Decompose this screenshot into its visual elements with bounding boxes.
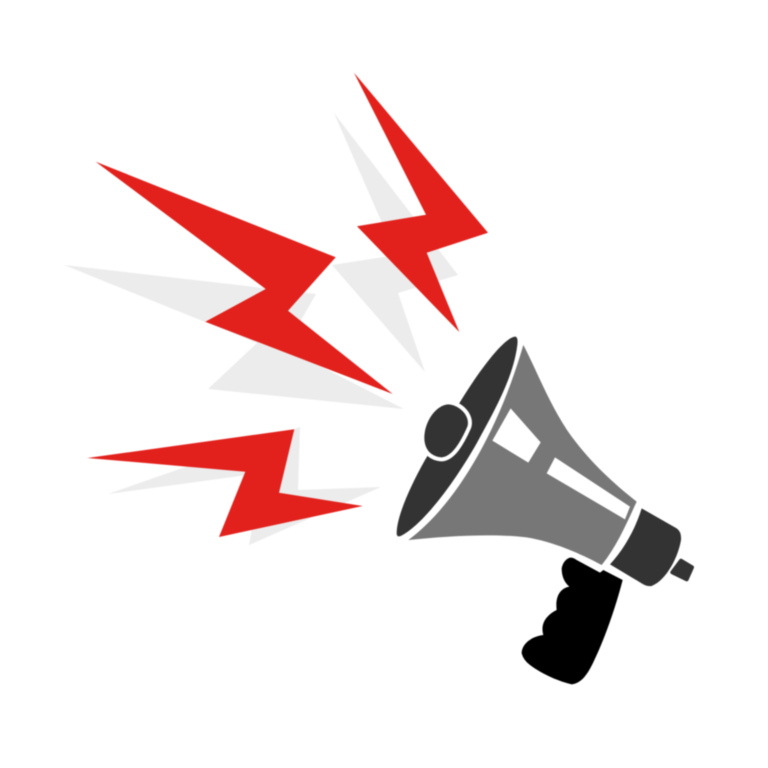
shadow: top bolt bbox=[332, 113, 458, 372]
shadow: bottom bolt bbox=[108, 427, 381, 545]
icon: megaphone bbox=[397, 337, 692, 684]
cone highlight: small window bbox=[492, 408, 541, 463]
shadow: large bolt bbox=[64, 265, 404, 409]
megaphone side button bbox=[424, 404, 468, 457]
bolt: large bbox=[96, 162, 393, 394]
megaphone cone bbox=[408, 345, 637, 565]
megaphone collar bbox=[610, 508, 681, 586]
cone highlight: long stripe bbox=[547, 457, 630, 519]
megaphone rear knob bbox=[672, 561, 692, 579]
bolt: top bbox=[354, 73, 488, 332]
red lightning bolts bbox=[87, 73, 488, 537]
megaphone mouth rim bbox=[397, 337, 518, 536]
megaphone handle bbox=[522, 558, 623, 684]
bolt: bottom bbox=[87, 429, 363, 537]
bolt shadows bbox=[64, 113, 458, 545]
